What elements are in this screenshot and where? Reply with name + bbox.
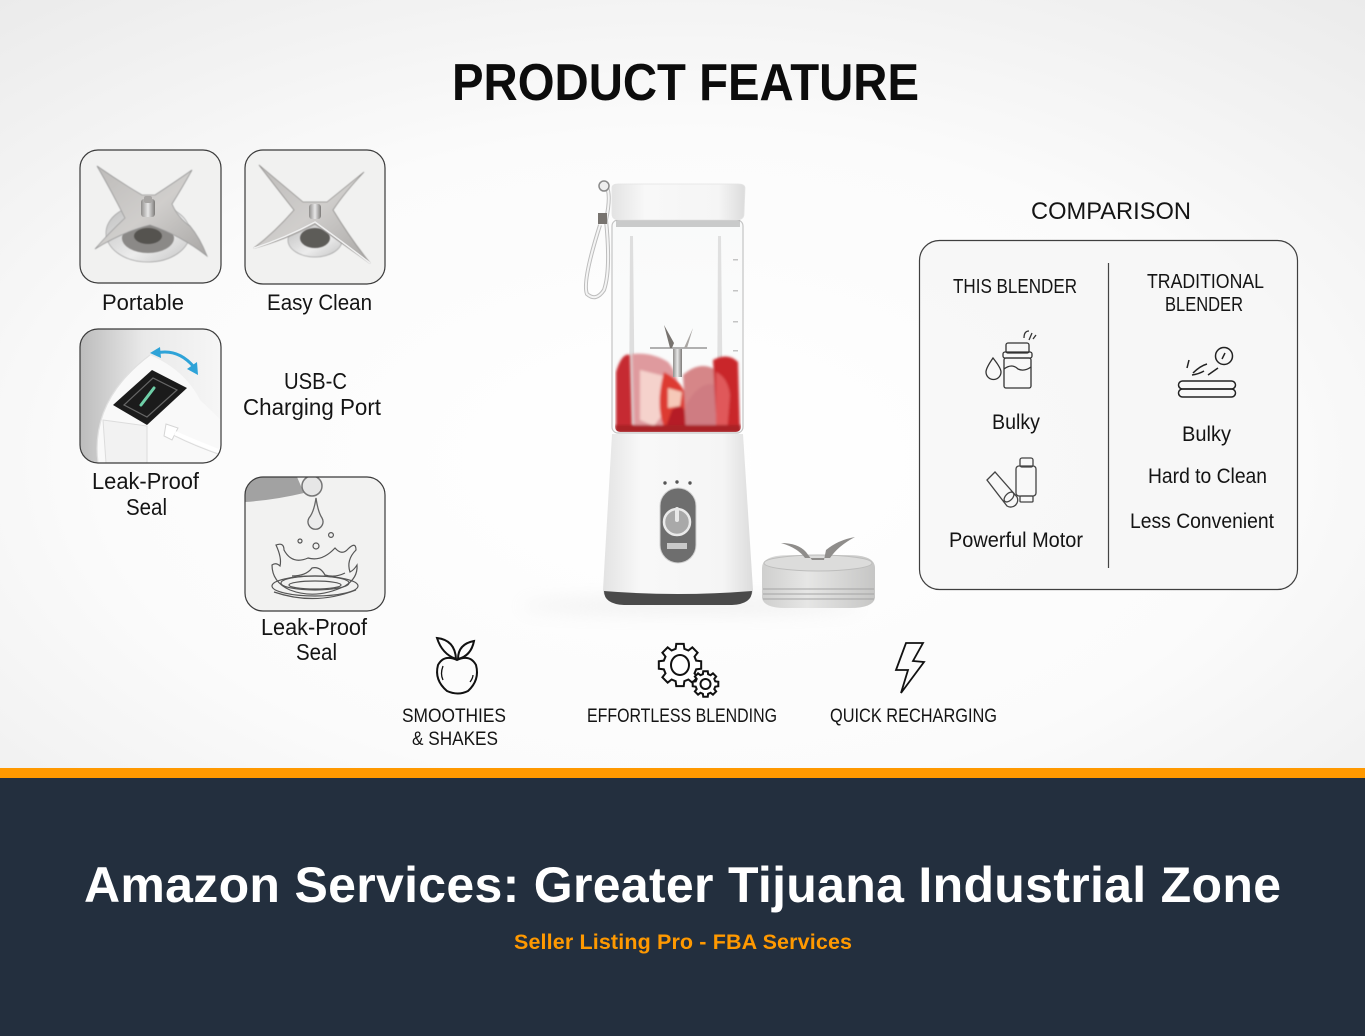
strawberries (615, 354, 741, 433)
measure marks (733, 259, 738, 352)
label: smoothies and shakes: & SHAKES (412, 728, 498, 750)
label: portable: Portable (102, 290, 184, 315)
text: bulky: Bulky (992, 411, 1040, 434)
page background (0, 0, 1365, 768)
label: usb-c charging port: USB-C (284, 368, 347, 394)
text: powerful motor: Powerful Motor (949, 529, 1083, 552)
label: usb-c charging port (243, 368, 382, 420)
label: quick recharging: QUICK RECHARGING (830, 705, 997, 727)
product: personal blender (520, 181, 860, 613)
panel: water drop splash (245, 476, 385, 611)
footer subtitle: Seller Listing Pro - FBA Services (514, 930, 852, 954)
icon: gears (659, 644, 718, 697)
column heading: traditional blender: TRADITIONAL (1147, 271, 1264, 293)
column heading: this blender: THIS BLENDER (953, 276, 1077, 298)
base (603, 434, 753, 598)
label: leak-proof seal left (92, 468, 200, 520)
icon: jar with drop (986, 331, 1036, 388)
heading: comparison: COMPARISON (1031, 198, 1191, 225)
text: hard to clean: Hard to Clean (1148, 465, 1267, 488)
column heading: traditional blender (1147, 271, 1264, 316)
label: leak-proof seal lower (261, 614, 368, 665)
footer band (0, 768, 1365, 1036)
panel: easy clean blade (245, 150, 385, 284)
panel: comparison table (920, 240, 1298, 590)
footer title: Amazon Services: Greater Tijuana Industrial Zone (84, 857, 1281, 913)
icon: lightning bolt (896, 643, 924, 693)
product: blade base (762, 537, 875, 608)
icon: splash crown (272, 533, 358, 599)
label: leak-proof seal left: Leak-Proof (92, 468, 200, 494)
label: leak-proof seal lower: Leak-Proof (261, 614, 368, 640)
icon: bottle and capsule (987, 458, 1036, 507)
blades in jar (650, 347, 707, 349)
strap (586, 184, 609, 297)
panel: usb-c port (80, 329, 221, 463)
label: effortless blending: EFFORTLESS BLENDING (587, 705, 777, 727)
label: smoothies and shakes (402, 705, 506, 750)
icon: stacked layers with ball (1178, 348, 1236, 397)
label: smoothies and shakes: SMOOTHIES (402, 705, 506, 727)
icon: apple (437, 638, 477, 694)
title: PRODUCT FEATURE (452, 54, 919, 112)
label: usb-c charging port: Charging Port (243, 394, 382, 420)
label: leak-proof seal left: Seal (126, 494, 167, 520)
column heading: traditional blender: BLENDER (1165, 294, 1243, 316)
text: less convenient: Less Convenient (1130, 510, 1274, 533)
icon: drop (308, 498, 323, 529)
icon: blue rotate arrow (150, 347, 198, 375)
label: easy clean: Easy Clean (267, 290, 372, 315)
lid (612, 184, 745, 220)
label: leak-proof seal lower: Seal (296, 639, 337, 665)
text: bulky: Bulky (1182, 423, 1231, 446)
power button (660, 488, 696, 563)
panel: portable blade (80, 150, 221, 283)
jar (612, 220, 743, 433)
